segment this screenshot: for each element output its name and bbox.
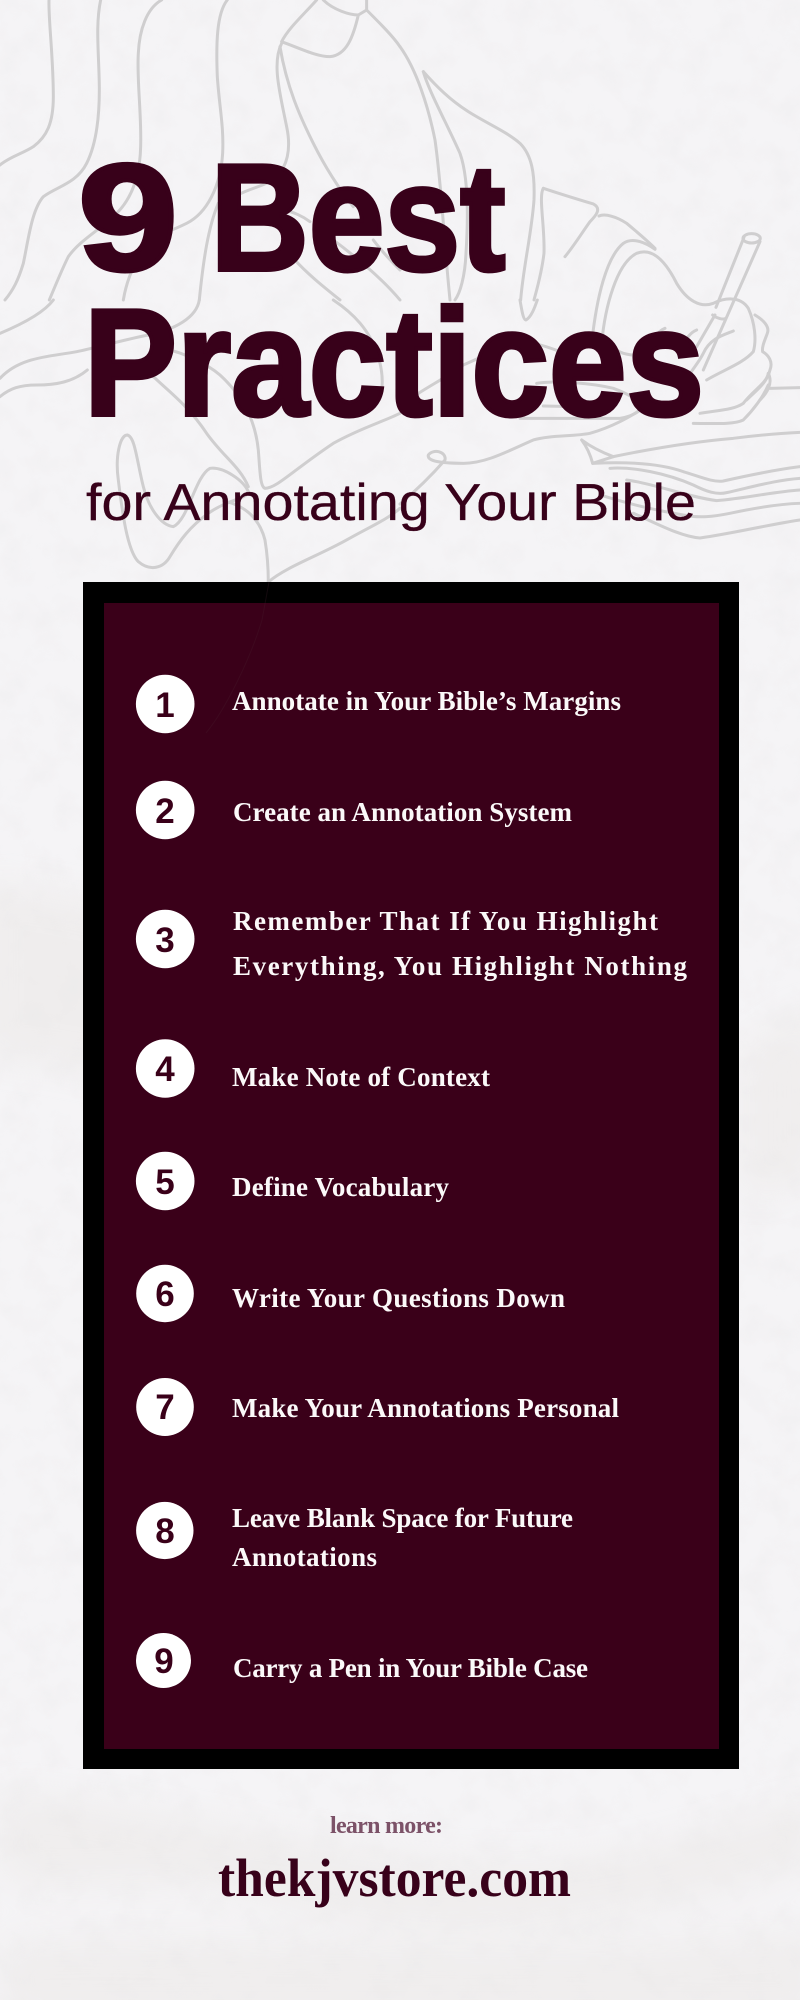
item 3: Remember That If You Highlight [233, 906, 658, 936]
item 3: 3 [155, 921, 175, 960]
learn more label: learn more: [330, 1813, 443, 1839]
panel: practices list [83, 582, 739, 1769]
item 1: 1 [155, 686, 175, 725]
item 6: Write Your Questions Down [232, 1283, 565, 1313]
item 9 [136, 1633, 588, 1688]
title [78, 133, 704, 448]
subtitle: for Annotating Your Bible [86, 474, 696, 532]
item 9: Carry a Pen in Your Bible Case [233, 1653, 588, 1683]
item 7: Make Your Annotations Personal [232, 1393, 619, 1423]
item 4: 4 [155, 1050, 175, 1089]
item 6 [136, 1265, 565, 1322]
title: Best [210, 133, 506, 303]
item 7 [136, 1378, 619, 1436]
item 8: 8 [155, 1512, 175, 1551]
title: Practices [84, 278, 704, 448]
item 3 [136, 906, 687, 981]
item 3: Everything, You Highlight Nothing [233, 951, 688, 981]
item 8: Annotations [232, 1542, 377, 1572]
item 1 [136, 675, 621, 733]
item 5: Define Vocabulary [232, 1172, 450, 1202]
item 4 [136, 1039, 490, 1098]
item 2: Create an Annotation System [233, 797, 572, 827]
item 5 [136, 1152, 450, 1210]
website url: thekjvstore.com [218, 1848, 571, 1908]
item 6: 6 [155, 1275, 175, 1314]
item 5: 5 [155, 1163, 175, 1202]
item 2 [136, 781, 572, 839]
item 8: Leave Blank Space for Future [232, 1503, 573, 1533]
title: 9 [78, 133, 178, 303]
item 9: 9 [154, 1642, 174, 1681]
line art: person writing in a Bible [0, 0, 800, 582]
item 8 [136, 1502, 573, 1572]
item 4: Make Note of Context [232, 1062, 490, 1092]
item 2: 2 [155, 792, 175, 831]
item 7: 7 [155, 1388, 175, 1427]
item 1: Annotate in Your Bible’s Margins [232, 686, 621, 716]
